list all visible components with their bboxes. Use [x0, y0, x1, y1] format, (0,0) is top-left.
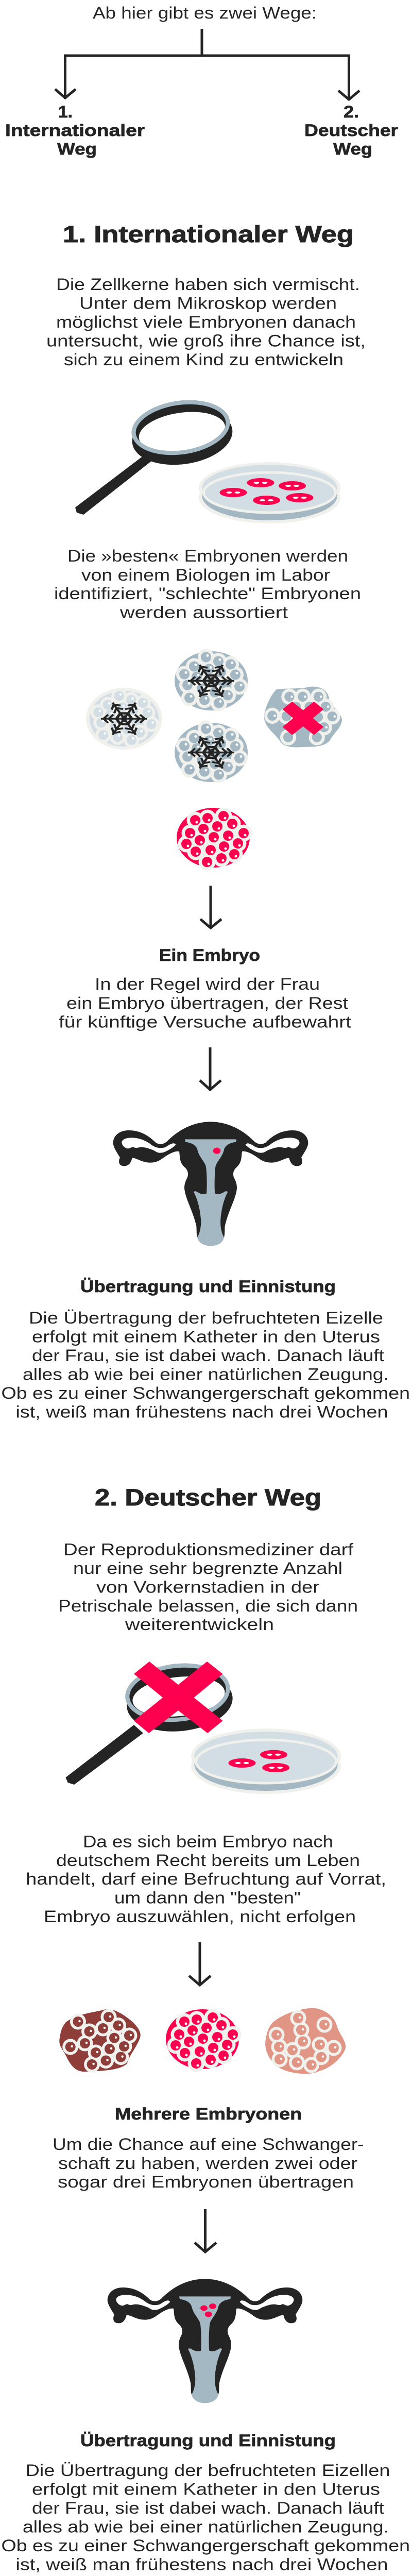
- subheading: Ein Embryo: Ein Embryo: [159, 946, 260, 964]
- label: route 1: Weg: [57, 140, 97, 158]
- icon: crossed-out magnifying glass: [66, 1658, 235, 1785]
- text: best embryos identified: Die »besten« Embryonen werden: [67, 547, 348, 565]
- text: transfer description: der Frau, sie ist dabei wach. Danach läuft: [32, 2499, 384, 2517]
- label: route 2: 2.: [344, 103, 359, 121]
- text: microscope examination: untersucht, wie groß ihre Chance ist,: [46, 332, 366, 350]
- text: transfer description: [1, 2461, 410, 2574]
- subheading: transfer and implantation: Übertragung und Einnistung: [80, 1277, 336, 1296]
- text: transfer description: erfolgt mit einem Katheter in den Uterus: [32, 2480, 380, 2499]
- label: route 1: [5, 103, 145, 158]
- text: German law limits: weiterentwickeln: [125, 1615, 274, 1634]
- text: best embryos identified: [54, 547, 361, 621]
- text: best embryos identified: werden aussortiert: [119, 603, 288, 621]
- text: transfer description: der Frau, sie ist dabei wach. Danach läuft: [32, 1346, 384, 1365]
- text: transfer description: ist, weiß man frühestens nach drei Wochen: [15, 1402, 388, 1421]
- text: transfer description: [1, 1309, 410, 1421]
- text: microscope examination: Die Zellkerne haben sich vermischt.: [56, 275, 360, 294]
- text: embryo transfer: In der Regel wird der Frau: [95, 975, 320, 993]
- icon: frozen embryo, bottom: [175, 723, 248, 782]
- text: multiple embryos transferred: sogar drei Embryonen übertragen: [58, 2173, 354, 2191]
- heading: 1. Internationaler Weg: 1. Internationaler Weg: [63, 221, 354, 247]
- text: no fertilisation in reserve: deutschem Recht bereits um Leben: [56, 1851, 360, 1870]
- text: German law limits: [58, 1540, 358, 1634]
- heading: 2. Deutscher Weg: 2. Deutscher Weg: [95, 1484, 321, 1511]
- text: transfer description: alles ab wie bei einer natürlichen Zeugung.: [23, 2517, 389, 2536]
- text: German law limits: Der Reproduktionsmediziner darf: [63, 1540, 353, 1559]
- arrow: [200, 886, 221, 928]
- icon: brown embryo: [59, 2009, 141, 2072]
- icon: uterus with three embryos: [108, 2279, 302, 2403]
- text: transfer description: Ob es zu einer Schwangergerschaft gekommen: [1, 2536, 410, 2555]
- icon: pink embryo: [265, 2008, 346, 2074]
- text: transfer description: ist, weiß man frühestens nach drei Wochen: [15, 2555, 388, 2574]
- text: transfer description: alles ab wie bei einer natürlichen Zeugung.: [23, 1365, 389, 1384]
- text: multiple embryos transferred: Um die Chance auf eine Schwanger-: [53, 2135, 364, 2154]
- subheading: Mehrere Embryonen: Mehrere Embryonen: [115, 2105, 302, 2123]
- text: embryo transfer: für künftige Versuche aufbewahrt: [59, 1013, 351, 1031]
- text: German law limits: Petrischale belassen, die sich dann: [58, 1597, 358, 1615]
- branching arrows: [55, 29, 359, 100]
- arrow: [200, 1047, 221, 1090]
- icon: selected embryo: [177, 808, 250, 868]
- text: microscope examination: [46, 275, 366, 369]
- text: transfer description: Ob es zu einer Schwangergerschaft gekommen: [1, 1384, 410, 1402]
- label: route 2: Deutscher: [304, 121, 398, 140]
- icon: frozen embryo, pale: [86, 688, 162, 750]
- icon: petri dish with five embryos: [199, 462, 340, 523]
- text: German law limits: nur eine sehr begrenzte Anzahl: [73, 1559, 342, 1578]
- arrow: [189, 1942, 211, 1985]
- arrow: [195, 2209, 216, 2252]
- text: no fertilisation in reserve: Da es sich beim Embryo nach: [83, 1832, 333, 1851]
- icon: magnifying glass: [75, 394, 236, 515]
- text: multiple embryos transferred: [53, 2135, 364, 2191]
- text: no fertilisation in reserve: handelt, darf eine Befruchtung auf Vorrat,: [26, 1870, 386, 1888]
- icon: petri dish with three embryos: [191, 1728, 341, 1794]
- label: route 2: [304, 103, 398, 158]
- text: embryo transfer: [59, 975, 351, 1031]
- label: route 1: Internationaler: [5, 121, 145, 140]
- intro line: Ab hier gibt es zwei Wege:: [93, 4, 317, 22]
- text: no fertilisation in reserve: um dann den "besten": [114, 1889, 301, 1907]
- text: microscope examination: Unter dem Mikroskop werden: [79, 294, 337, 312]
- text: German law limits: von Vorkernstadien in der: [96, 1578, 319, 1596]
- text: no fertilisation in reserve: Embryo auszuwählen, nicht erfolgen: [44, 1907, 356, 1926]
- text: transfer description: erfolgt mit einem Katheter in den Uterus: [32, 1327, 380, 1346]
- text: multiple embryos transferred: schaft zu haben, werden zwei oder: [58, 2154, 357, 2173]
- icon: rejected embryo with red cross: [264, 687, 342, 748]
- text: no fertilisation in reserve: [26, 1832, 386, 1926]
- text: microscope examination: möglichst viele Embryonen danach: [56, 313, 356, 331]
- icon: uterus with one embryo: [113, 1122, 308, 1246]
- icon: red embryo: [166, 2009, 239, 2069]
- text: best embryos identified: von einem Biologen im Labor: [81, 566, 330, 584]
- label: route 2: Weg: [333, 140, 372, 158]
- text: transfer description: Die Übertragung der befruchteten Eizellen: [26, 2461, 390, 2480]
- text: embryo transfer: ein Embryo übertragen, der Rest: [66, 994, 348, 1012]
- icon: frozen embryo, top: [175, 651, 248, 710]
- red cross: [134, 1662, 222, 1733]
- text: best embryos identified: identifiziert, "schlechte" Embryonen: [54, 584, 361, 603]
- subheading: transfer and implantation: Übertragung und Einnistung: [80, 2431, 336, 2450]
- text: transfer description: Die Übertragung der befruchteten Eizelle: [29, 1309, 383, 1327]
- text: microscope examination: sich zu einem Kind zu entwickeln: [64, 350, 344, 369]
- label: route 1: 1.: [58, 103, 73, 121]
